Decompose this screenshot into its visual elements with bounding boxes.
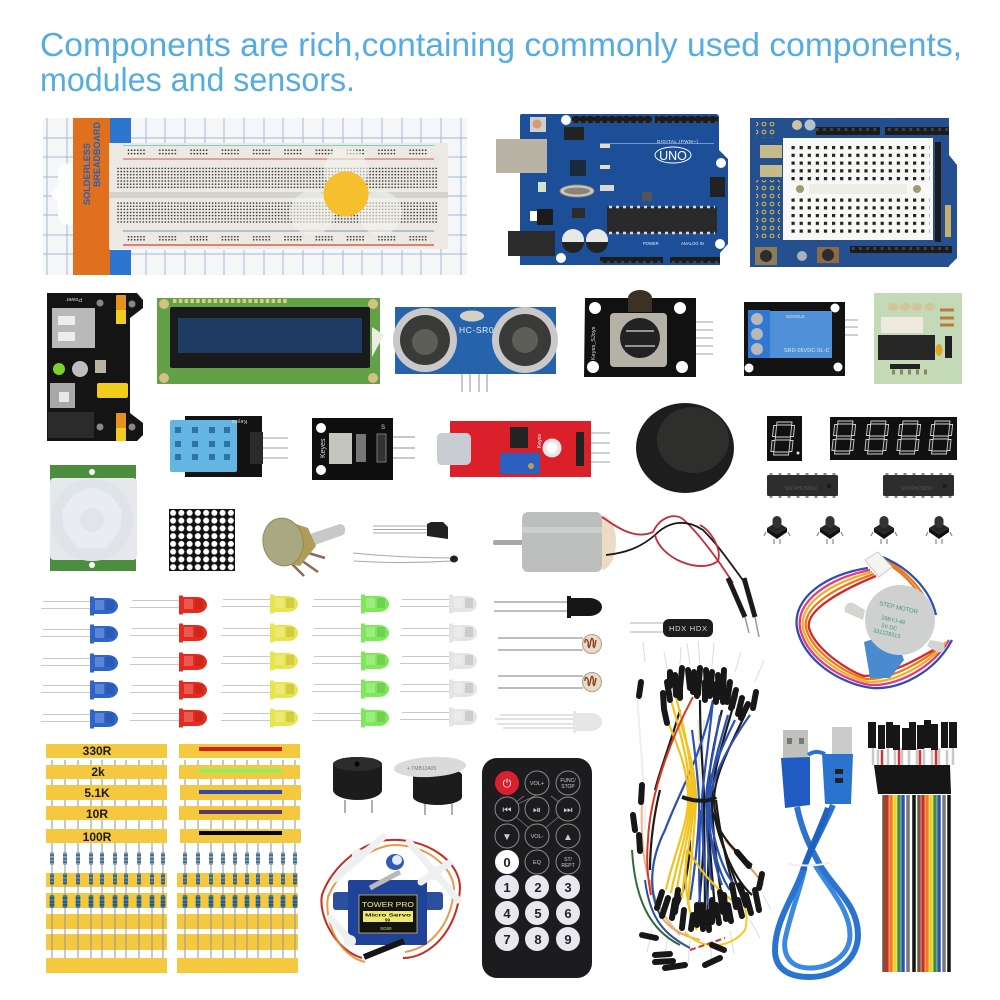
servo body [333, 892, 443, 910]
orange header card [73, 118, 131, 275]
number labels: 5 [534, 906, 542, 921]
piezo buzzers [333, 755, 466, 815]
control labels [502, 778, 576, 869]
panel: HC-SR04 ultrasonic sensor [393, 307, 558, 392]
resistor value labels: 2k [91, 765, 105, 779]
servo label: Micro Servo [365, 912, 411, 918]
row of clear white LEDs [400, 594, 477, 726]
stepper motor with wires: 331228313 [873, 628, 901, 640]
plug A [781, 730, 810, 808]
blue gearbox [864, 632, 904, 678]
panel: Arduino UNO board: POWER [643, 241, 659, 246]
panel: DHT11 module: Keyes [231, 418, 247, 424]
number labels: 6 [564, 906, 572, 921]
solder pads [756, 122, 782, 238]
screw [370, 872, 400, 888]
title: Components are rich,containing commonly used components, [40, 27, 962, 64]
title [40, 27, 962, 99]
title: modules and sensors. [40, 62, 355, 99]
servo horns [330, 837, 458, 941]
74HC595 DIP chips: SN74HC595N [901, 486, 933, 492]
crystal [560, 185, 594, 197]
resistor value labels: 10R [86, 807, 108, 821]
number keys [495, 850, 580, 951]
stepper motor with wires [797, 552, 952, 688]
control labels: VOL- [531, 834, 544, 840]
8x8 LED dot matrix [169, 509, 235, 571]
cable [775, 805, 858, 977]
color code bars [199, 747, 282, 835]
panel: relay module: SONGLE [786, 314, 805, 319]
panel: breadboard power module [47, 293, 143, 441]
number labels: 1 [503, 880, 511, 895]
panel: sound sensor module: Keyes [537, 434, 543, 448]
cable tie [682, 797, 716, 801]
stepper motor with wires: STEP MOTOR [879, 601, 919, 616]
power jack [48, 412, 94, 438]
USB cable [775, 727, 858, 977]
control labels: EQ [533, 860, 542, 866]
control labels: VOL+ [530, 781, 544, 787]
resistors left [50, 760, 165, 958]
panel: sound sensor module [437, 421, 610, 477]
panel: HC-SR04 ultrasonic sensor: HC-SR04 [459, 325, 500, 335]
potentiometer [259, 515, 345, 576]
control labels: STOP [561, 784, 575, 790]
green LED [53, 363, 65, 375]
row of blue LEDs [41, 596, 118, 728]
USB port [496, 139, 547, 173]
tactile push buttons [764, 516, 952, 544]
row of red LEDs [130, 596, 207, 728]
panel: tilt / Keyes sensor module [312, 418, 415, 480]
number labels: 2 [534, 880, 542, 895]
number labels: 3 [564, 880, 572, 895]
panel: tilt / Keyes sensor module: S [381, 425, 385, 431]
yellow dome and translucent blister [290, 148, 402, 235]
capacitor and regulator [72, 361, 88, 377]
SG90 micro servo [321, 837, 460, 962]
infrared receiver LED [494, 596, 602, 618]
white connector [865, 552, 892, 577]
panel: tilt / Keyes sensor module: Keyes [320, 438, 327, 458]
panel: joystick module [584, 290, 713, 377]
photoresistors [498, 634, 602, 692]
power button: ⏻ [503, 778, 512, 790]
power button [495, 771, 519, 795]
resistor value labels: 100R [83, 830, 112, 844]
panel: prototype shield with mini breadboard [750, 118, 957, 267]
control buttons [495, 771, 580, 874]
red wire [647, 697, 693, 895]
servo label: 99 [385, 918, 391, 922]
four-digit 7-segment display [830, 417, 957, 460]
black wires [650, 700, 752, 925]
panel: relay module [744, 302, 858, 376]
control labels: ⏭ [564, 805, 572, 816]
resistors right [183, 760, 297, 958]
panel: LCD1602 display [157, 298, 384, 384]
row of yellow LEDs [221, 594, 298, 728]
mini breadboard [783, 138, 933, 240]
blue wires [652, 700, 750, 915]
jumpers [97, 295, 128, 441]
plug B [822, 727, 853, 804]
jumper wire bundle [632, 641, 771, 968]
piezo buzzers: + TMB12A05 [407, 766, 436, 772]
resistor value labels [83, 744, 112, 844]
joystick cap [636, 403, 734, 493]
resistor value labels: 5.1K [84, 786, 110, 800]
switch [50, 383, 75, 408]
black pin housings bottom [642, 852, 762, 968]
servo label: TOWER PRO [362, 902, 415, 909]
servo label [359, 895, 417, 933]
reset button [530, 117, 546, 132]
DC motor [493, 512, 759, 637]
control labels: FUNC/ [560, 778, 576, 784]
breadboard body [109, 143, 448, 249]
capacitors [562, 229, 608, 253]
stepper motor with wires: 28BYJ-48 [881, 615, 905, 626]
74HC595 DIP chips: SN74HC595N [785, 486, 817, 492]
control labels: ⏯ [533, 805, 541, 816]
74HC595 DIP chips [767, 473, 954, 498]
yellow wires [664, 697, 738, 930]
pin headers [816, 127, 952, 253]
panel: joystick module: Keyes_SJoys [591, 326, 597, 360]
panel: Arduino UNO board: ANALOG IN [681, 241, 704, 246]
row of green LEDs [312, 594, 389, 728]
DC jack [508, 231, 555, 256]
control labels: ⏮ [502, 805, 512, 816]
PIR motion sensor [50, 465, 137, 571]
panel: Arduino UNO board [496, 114, 728, 265]
stepper motor with wires: 5V DC [881, 623, 898, 633]
panel: DHT11 module [170, 416, 288, 477]
panel: relay module: SRD-05VDC-SL-C [784, 348, 830, 354]
yellow resistor strips: right [177, 744, 301, 973]
white tie [788, 863, 830, 865]
resistor value labels: 330R [83, 744, 112, 758]
servo label: SG90 [380, 926, 392, 931]
USB socket [52, 308, 95, 348]
number labels: 8 [534, 932, 542, 947]
number labels: 4 [503, 906, 511, 921]
panel: solderless breadboard package [43, 118, 467, 275]
transistor [373, 522, 448, 539]
number labels: 0 [503, 855, 511, 870]
yellow resistor label strips: left [46, 744, 167, 973]
panel: Arduino UNO board: DIGITAL (PWM~) [657, 139, 698, 144]
motor wires [602, 516, 745, 583]
tilt switch: HDX HDX [669, 624, 707, 633]
pin tips [643, 641, 771, 964]
control labels: ▼ [502, 832, 512, 843]
servo connector [364, 941, 404, 957]
single-digit 7-segment display [767, 416, 802, 461]
wire loop [797, 557, 952, 688]
headers [564, 116, 725, 263]
horn hubs [344, 849, 442, 947]
motor wire connectors [728, 578, 755, 617]
motor body [865, 585, 935, 655]
panel: breadboard power module: Power [66, 296, 82, 302]
tactile buttons [755, 247, 839, 265]
control labels: ST/ [564, 857, 572, 863]
small parts [530, 115, 726, 263]
IR remote control [482, 758, 592, 978]
control labels: REPT [561, 863, 575, 869]
black pin housings top [633, 668, 756, 851]
white and orange outer wires [632, 695, 763, 950]
panel: ULN2003 driver board [874, 293, 962, 384]
LEDs [792, 120, 951, 261]
thermistor [353, 553, 458, 562]
number labels: 9 [564, 932, 572, 947]
RGB LED [495, 711, 602, 733]
servo wire loop [321, 840, 460, 962]
orange header card: SOLDERLESS [82, 143, 92, 205]
number labels: 7 [503, 932, 511, 947]
ATmega chip [607, 207, 717, 233]
upper housings [868, 720, 957, 750]
exposed crimps [873, 748, 953, 765]
upper strips over leads [46, 765, 167, 843]
orange header card: BREADBOARD [92, 122, 102, 187]
rainbow Dupont ribbon cable [868, 720, 957, 972]
UNO logo [655, 147, 691, 163]
tilt switch [630, 619, 713, 637]
UNO logo: UNO [659, 149, 687, 163]
control labels: ▲ [563, 832, 573, 843]
number labels [503, 855, 572, 947]
lower housings [874, 765, 951, 794]
